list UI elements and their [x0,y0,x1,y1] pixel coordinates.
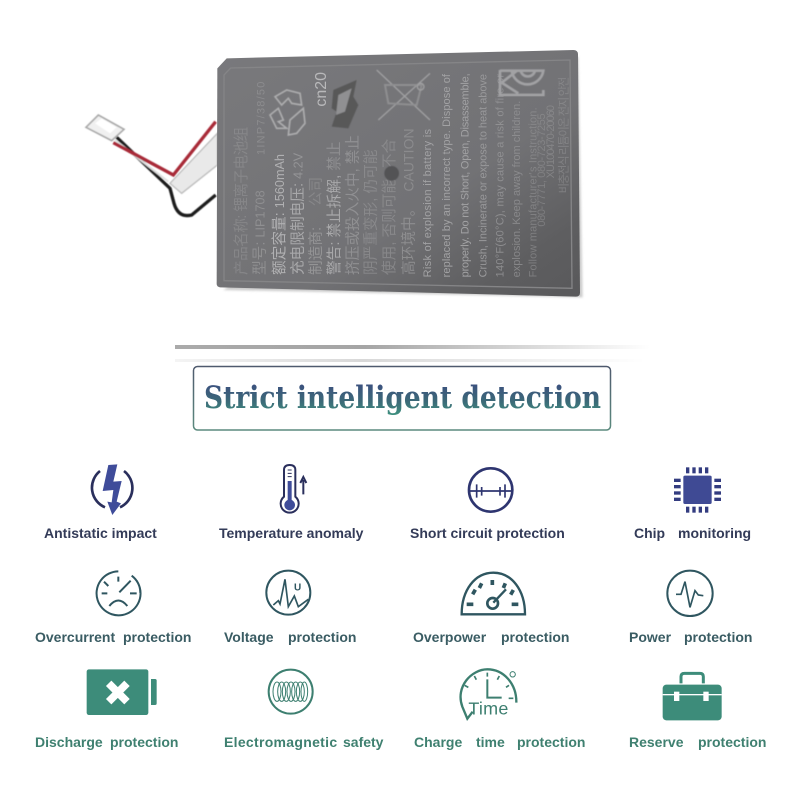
item: Charge time protection: Charge [414,734,462,750]
item: Voltage protection: protection [288,629,356,645]
item: Chip monitoring: Chip [634,525,665,541]
icon: speedometer [462,573,525,614]
item: Electromagnetic safety: safety [343,734,384,750]
item: Overpower protection: Overpower [413,629,486,645]
title: Strict intelligent detection [204,380,601,416]
item: Charge time protection [414,669,585,750]
vent dot [384,166,399,181]
UL mark [332,80,358,128]
item: Antistatic impact [44,464,157,541]
battery label text: 挤压或投入火中, 禁止 [344,135,361,275]
battery label text [233,73,570,277]
icon: power pulse [667,571,713,616]
item: Electromagnetic safety [224,670,384,750]
battery label text: Crush, Incinerate or expose to heat above [478,74,490,277]
battery wires and connector [86,115,217,216]
item: Electromagnetic safety: Electromagnetic [224,734,337,750]
crossed-out bin symbol [377,70,430,120]
battery label text: 充电限制电压: 4.2V [290,152,307,275]
battery label text: 型号: LIP1708 [251,190,268,275]
KC mark [500,70,543,95]
icon: coil [269,670,313,714]
title [194,366,610,430]
item: Overcurrent protection [35,571,191,645]
item: Short circuit protection [410,468,565,541]
battery label text: 1INP7/38/50 [255,82,267,155]
icon: clock with Time [461,669,516,719]
item: Short circuit protection: Short circuit protection [410,525,565,541]
battery label text: 阴严重变形, 仍可能 [363,149,380,275]
icon: thermometer [281,465,306,513]
item: Charge time protection: time [476,734,505,750]
battery label text: 高环境中。 [399,202,417,275]
item: Power protection: protection [684,629,752,645]
item: Discharge protection [35,669,178,750]
item: Reserve protection: protection [698,734,766,750]
item: Chip monitoring: monitoring [678,525,751,541]
item: Temperature anomaly [219,465,364,541]
battery label text: 警告: 禁止拆解, 禁止 [326,141,343,275]
icon: sad gauge [97,571,141,615]
item: Discharge protection: Discharge [35,734,103,750]
divider lines [175,345,650,362]
battery label text: XU100470-20060 [545,105,557,178]
item: Reserve protection: Reserve [629,734,684,750]
battery body [217,50,580,297]
item: Overpower protection [413,573,569,645]
item: Power protection [629,571,752,645]
battery label text: 080-7771, 080-723-7255 [536,113,548,227]
battery photo [86,50,583,297]
icon: short circuit [469,468,513,512]
battery label text: CAUTION [400,128,416,192]
certification text cn20: cn20 [313,72,330,107]
item: Reserve protection [629,673,766,750]
item: Chip monitoring [634,467,751,541]
battery label text: replaced by an incorrect type. Dispose of [441,73,453,277]
battery shadow [223,57,583,297]
battery label text: 额定容量: 1560mAh [271,154,288,275]
icon: voltage waveform: U [294,583,301,594]
item: Overcurrent protection: protection [123,629,191,645]
icon: toolbox [663,673,722,720]
battery label text: 使用, 否则可能 不合 [381,139,398,275]
battery label text: Follow manufacturer's Instruction. [528,107,540,277]
battery label text: 비충전식 리튬이온 전지 안전 [557,77,570,193]
item: Voltage protection [224,571,356,645]
battery label text: 产品名称: 锂离子电池组 [233,126,250,275]
battery label text: explosion. Keep away from children. [511,101,523,277]
battery label text: 140°F(60°C), may cause a risk of fire or [494,74,506,277]
item: Voltage protection: Voltage [224,629,274,645]
icon: lightning bolt [92,464,132,515]
item: Charge time protection: protection [517,734,585,750]
icon: clock with Time: Time [468,698,508,718]
battery label text: 制造商: 公司 [308,177,325,275]
item: Antistatic impact: Antistatic impact [44,525,157,541]
item: Power protection: Power [629,629,671,645]
item: Discharge protection: protection [110,734,178,750]
battery label text: properly. Do not Short, Open, Disassemble, [459,73,471,277]
item: Overpower protection: protection [501,629,569,645]
battery label text: Risk of explosion if battery is [422,128,434,277]
item: Temperature anomaly: Temperature anomaly [219,525,364,541]
recycling symbol [270,90,305,135]
item: Overcurrent protection: Overcurrent [35,629,115,645]
icon: chip [674,467,721,513]
icon: battery with cross [87,669,157,715]
